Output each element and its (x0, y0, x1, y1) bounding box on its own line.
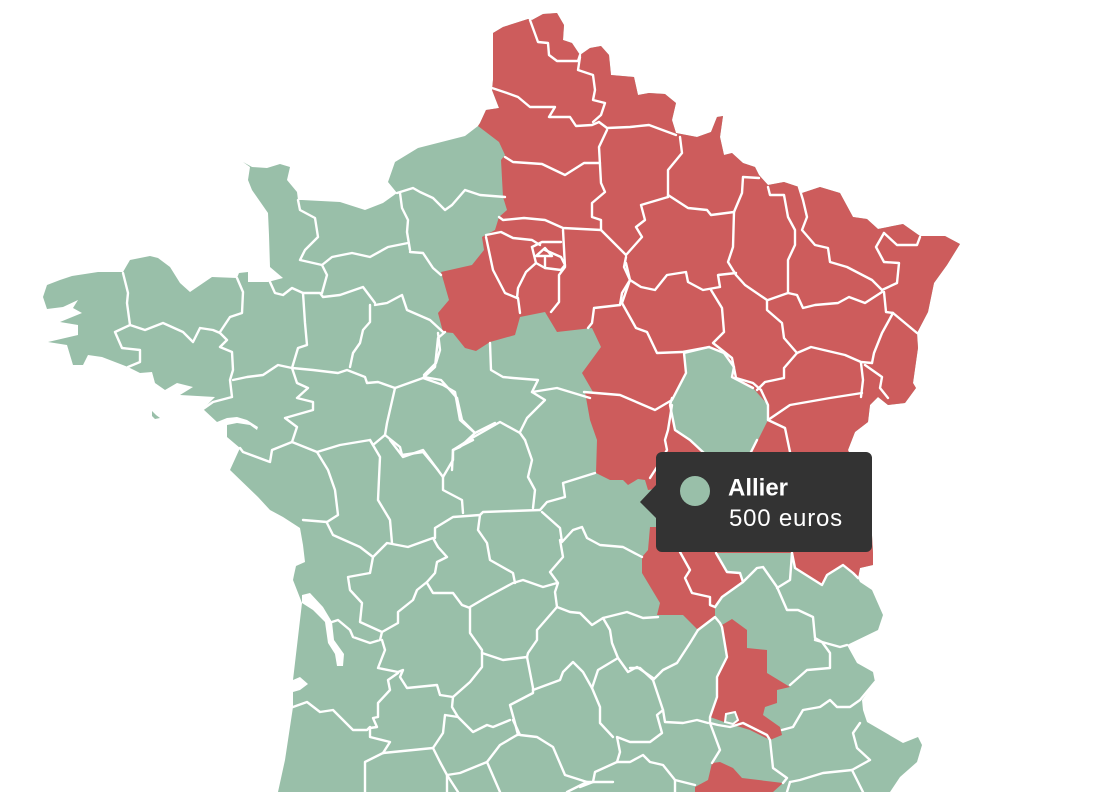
red department: bottom (695, 762, 783, 792)
enclave (725, 712, 738, 724)
green department in the red block (670, 347, 768, 456)
tooltip box with pointer (640, 452, 872, 552)
island (152, 411, 160, 419)
red department: centre south (710, 619, 790, 740)
tooltip value: 500 euros (729, 505, 843, 532)
tooltip department name: Allier (728, 474, 788, 502)
Gironde estuary cut-out (302, 593, 344, 666)
tooltip colour swatch (680, 476, 710, 506)
department borders (115, 20, 920, 792)
red departments: north and east block (438, 13, 960, 630)
tooltip (640, 452, 872, 552)
